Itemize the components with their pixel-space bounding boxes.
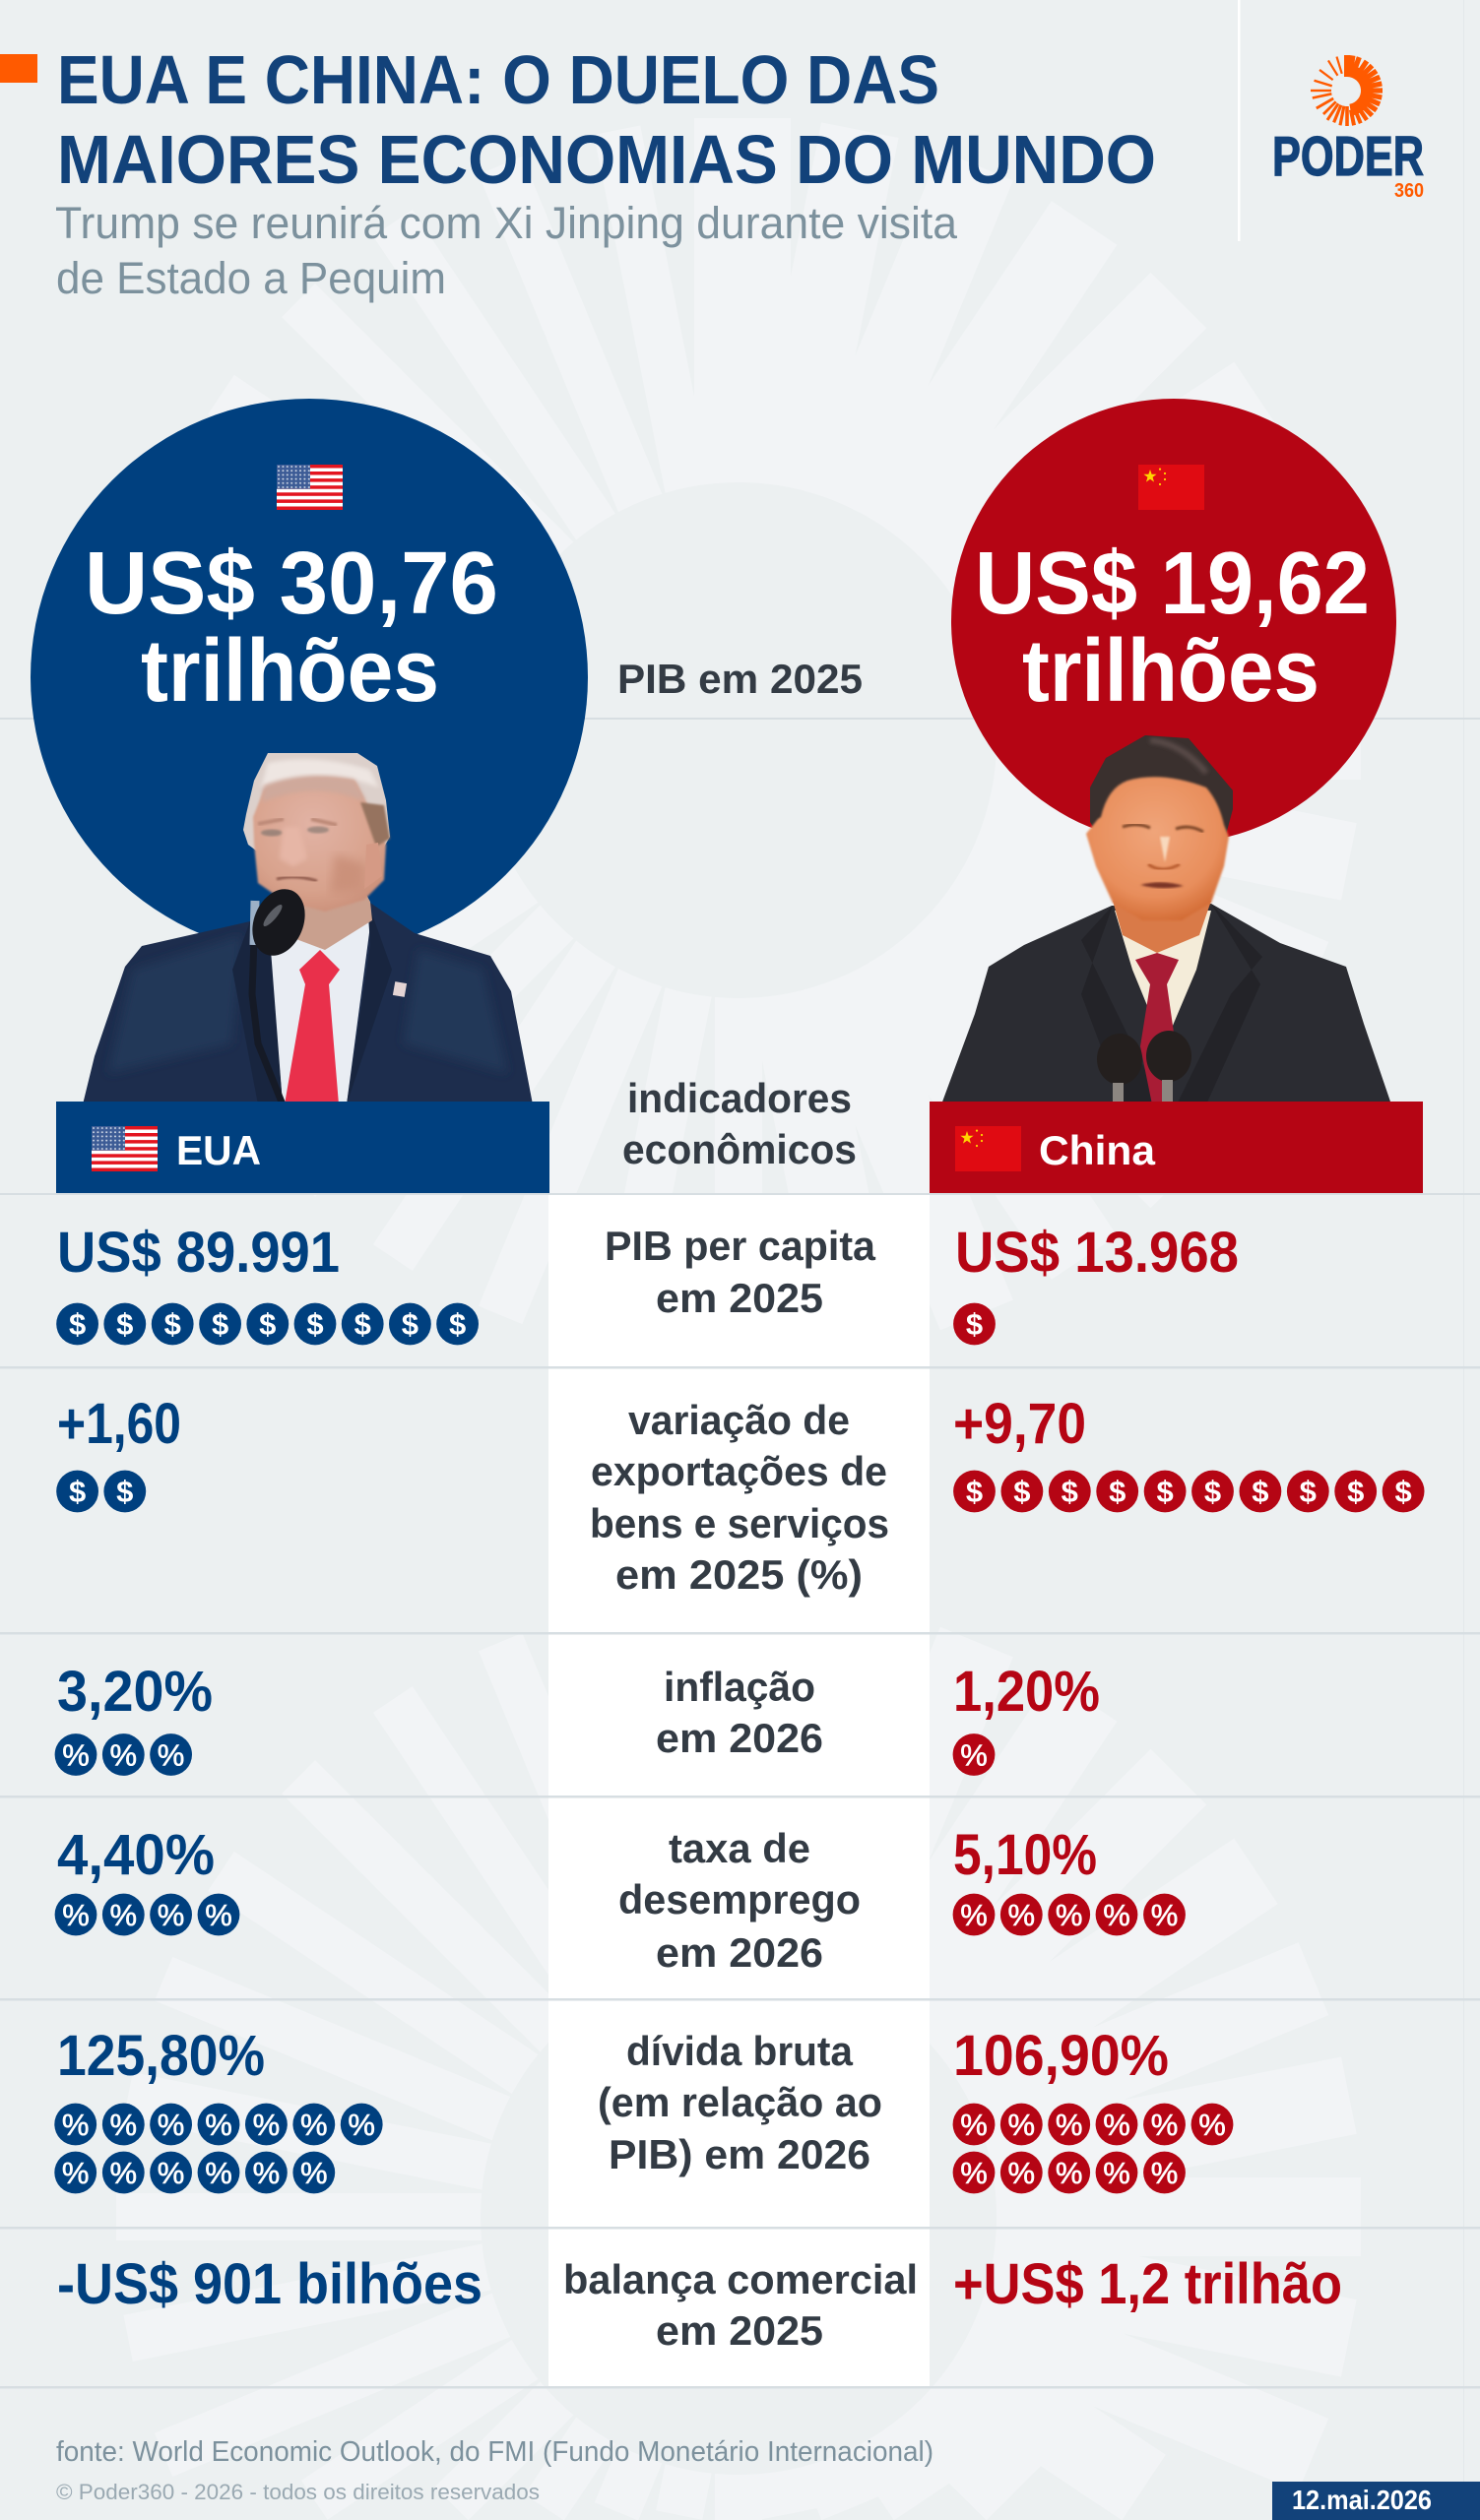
icons: China dollars: $ — [1156, 1475, 1174, 1508]
title accent square — [0, 54, 37, 83]
icons: China dollars: $ — [1394, 1475, 1412, 1508]
icons: EUA percent — [55, 1894, 239, 1935]
icons: China percent: % — [1151, 2156, 1178, 2190]
icons: China percent: % — [1151, 1898, 1178, 1932]
value: EUA: -US$ 901 bilhões — [57, 2252, 483, 2316]
row: desemprego — [55, 1823, 1186, 1976]
China GDP value — [975, 535, 1370, 721]
icons: China percent: % — [960, 2156, 988, 2190]
icons: EUA dollars: $ — [354, 1307, 371, 1341]
icons: EUA percent: % — [62, 1738, 90, 1772]
icons: EUA percent: % — [205, 2108, 232, 2142]
icons: EUA percent: % — [62, 1898, 90, 1932]
icons: EUA dollars: $ — [212, 1307, 228, 1341]
icons: EUA percent: % — [158, 1898, 184, 1932]
header: indicators column — [622, 1075, 857, 1172]
circle: USA GDP — [31, 399, 588, 956]
logo 360: 360 — [1394, 180, 1424, 202]
icon: China flag — [1138, 465, 1204, 510]
label — [618, 1825, 861, 1976]
icons: China percent — [953, 2104, 1233, 2193]
label — [656, 1664, 823, 1761]
icons: EUA dollars: $ — [449, 1307, 466, 1341]
header line — [0, 1193, 1480, 1195]
label: PIB) em 2026 — [609, 2131, 870, 2177]
icons: China dollars: $ — [1013, 1475, 1031, 1508]
value: China: +9,70 — [953, 1392, 1086, 1456]
China GDP value: US$ 19,62 — [975, 535, 1370, 633]
icons: China percent: % — [1008, 2156, 1035, 2190]
icons: EUA percent: % — [110, 2156, 137, 2190]
logo wordmark: PODER — [1272, 125, 1424, 188]
label: em 2026 — [656, 1929, 823, 1976]
icons: China dollars: $ — [966, 1475, 983, 1508]
subtitle: de Estado a Pequim — [56, 253, 446, 303]
header band: China — [930, 1102, 1423, 1193]
source note: fonte: World Economic Outlook, do FMI (Fundo Monetário Internacional) — [56, 2436, 933, 2468]
icons: China percent: % — [1151, 2108, 1178, 2142]
subtitle — [55, 198, 958, 303]
label — [598, 2028, 882, 2177]
row: exportações — [56, 1392, 1425, 1598]
icon: orange sun — [1311, 55, 1383, 126]
icons: EUA dollars: $ — [306, 1307, 324, 1341]
icons: EUA percent — [54, 2104, 383, 2193]
icons: EUA percent: % — [110, 1898, 137, 1932]
circle: China GDP — [951, 399, 1396, 844]
title: EUA E CHINA: O DUELO DAS — [57, 41, 939, 118]
label: em 2025 (%) — [615, 1551, 863, 1598]
icons: China percent: % — [1103, 2156, 1130, 2190]
China GDP value: trilhões — [1022, 622, 1319, 721]
icons: China dollars: $ — [1347, 1475, 1364, 1508]
icons: China dollars — [953, 1303, 996, 1345]
header band: EUA — [56, 1102, 549, 1193]
icons: EUA percent: % — [110, 2108, 137, 2142]
USA GDP value: trilhões — [141, 622, 439, 721]
label: exportações de — [591, 1448, 887, 1494]
row: inflação — [55, 1660, 1100, 1776]
label: desemprego — [618, 1876, 861, 1922]
value: EUA: 4,40% — [57, 1823, 215, 1887]
value: EUA: 3,20% — [57, 1660, 213, 1724]
icons: EUA percent: % — [253, 2108, 280, 2142]
icon: US flag — [277, 465, 343, 510]
icons: China percent: % — [1198, 2108, 1226, 2142]
icons: China percent: % — [1056, 2156, 1082, 2190]
header band: EUA: EUA — [176, 1127, 261, 1173]
icons: China percent — [953, 1733, 995, 1776]
icons: China percent: % — [1103, 2108, 1130, 2142]
logo: Poder360 — [1272, 55, 1424, 202]
icons: China dollars: $ — [1109, 1475, 1126, 1508]
label: PIB per capita — [605, 1223, 876, 1269]
icons: EUA percent: % — [62, 2108, 89, 2142]
icons: EUA dollars: $ — [164, 1307, 181, 1341]
label: taxa de — [669, 1825, 810, 1871]
USA GDP value: US$ 30,76 — [85, 535, 498, 633]
icons: China dollars: $ — [1252, 1475, 1269, 1508]
icons: China dollars: $ — [966, 1307, 983, 1341]
portrait: Trump — [83, 753, 533, 1104]
icons: EUA percent: % — [300, 2156, 328, 2190]
table row dividers — [0, 1366, 1480, 2388]
value: China: 106,90% — [953, 2024, 1169, 2088]
icons: EUA percent: % — [62, 2156, 89, 2190]
icons: China dollars — [953, 1471, 1424, 1512]
icons: China percent: % — [960, 2108, 988, 2142]
icons: EUA percent: % — [158, 1738, 184, 1772]
icons: EUA dollars: $ — [402, 1307, 418, 1341]
label — [563, 2256, 918, 2354]
icons: EUA percent: % — [158, 2108, 184, 2142]
label: variação de — [628, 1397, 850, 1443]
subtitle: Trump se reunirá com Xi Jinping durante visita — [55, 198, 958, 248]
icons: China dollars: $ — [1204, 1475, 1221, 1508]
portrait: Xi Jinping — [941, 735, 1391, 1104]
logo divider — [1238, 0, 1241, 241]
label — [605, 1223, 876, 1321]
GDP divider line — [0, 718, 1480, 720]
title: MAIORES ECONOMIAS DO MUNDO — [57, 121, 1156, 198]
label: dívida bruta — [626, 2028, 854, 2074]
value: China: 1,20% — [953, 1660, 1100, 1724]
label: em 2025 — [656, 1275, 823, 1321]
copyright: © Poder360 - 2026 - todos os direitos reservados — [56, 2480, 540, 2504]
icons: China percent: % — [960, 1738, 988, 1772]
label — [590, 1397, 889, 1598]
value: EUA: +1,60 — [57, 1392, 181, 1456]
icons: China percent — [953, 1894, 1186, 1935]
icons: EUA dollars — [56, 1303, 479, 1345]
value: China: +US$ 1,2 trilhão — [953, 2252, 1342, 2316]
icons: EUA dollars — [56, 1471, 146, 1512]
date tag: 12.mai.2026 — [1292, 2485, 1432, 2515]
label: em 2025 — [656, 2307, 823, 2354]
label: em 2026 — [656, 1715, 823, 1761]
icons: China dollars: $ — [1062, 1475, 1078, 1508]
icons: EUA percent — [55, 1733, 192, 1776]
icons: China percent: % — [960, 1898, 988, 1932]
icons: China percent: % — [1008, 2108, 1035, 2142]
icons: EUA dollars: $ — [69, 1475, 86, 1508]
icons: EUA percent: % — [348, 2108, 375, 2142]
header: indicators column: indicadores — [627, 1075, 852, 1121]
header band: China: China — [1039, 1127, 1156, 1173]
value: China: 5,10% — [953, 1823, 1097, 1887]
icons: EUA percent: % — [205, 2156, 232, 2190]
icons: EUA percent: % — [253, 2156, 280, 2190]
icons: China dollars: $ — [1300, 1475, 1317, 1508]
row: PIB per capita — [56, 1221, 1239, 1345]
icons: China percent: % — [1008, 1898, 1035, 1932]
center column — [548, 1195, 930, 2386]
icons: EUA dollars: $ — [116, 1307, 133, 1341]
row: balança comercial — [57, 2252, 1342, 2354]
icons: EUA dollars: $ — [259, 1307, 276, 1341]
title — [57, 41, 1156, 198]
label: (em relação ao — [598, 2079, 882, 2125]
icons: EUA dollars: $ — [116, 1475, 133, 1508]
icons: EUA dollars: $ — [69, 1307, 86, 1341]
icons: China percent: % — [1103, 1898, 1130, 1932]
value: EUA: 125,80% — [57, 2024, 265, 2088]
header: indicators column: econômicos — [622, 1126, 857, 1172]
icons: China percent: % — [1056, 1898, 1082, 1932]
icons: EUA percent: % — [158, 2156, 184, 2190]
icons: EUA percent: % — [300, 2108, 328, 2142]
label: balança comercial — [563, 2256, 918, 2302]
value: EUA: US$ 89.991 — [57, 1221, 340, 1285]
label: GDP: PIB em 2025 — [617, 656, 863, 702]
USA GDP value — [85, 535, 498, 721]
label: inflação — [664, 1664, 815, 1710]
icons: EUA percent: % — [205, 1898, 232, 1932]
icons: EUA percent: % — [110, 1738, 137, 1772]
icons: China percent: % — [1056, 2108, 1082, 2142]
date tag — [1272, 2482, 1480, 2520]
label: bens e serviços — [590, 1500, 889, 1546]
value: China: US$ 13.968 — [955, 1221, 1239, 1285]
row: dívida bruta — [54, 2024, 1233, 2193]
